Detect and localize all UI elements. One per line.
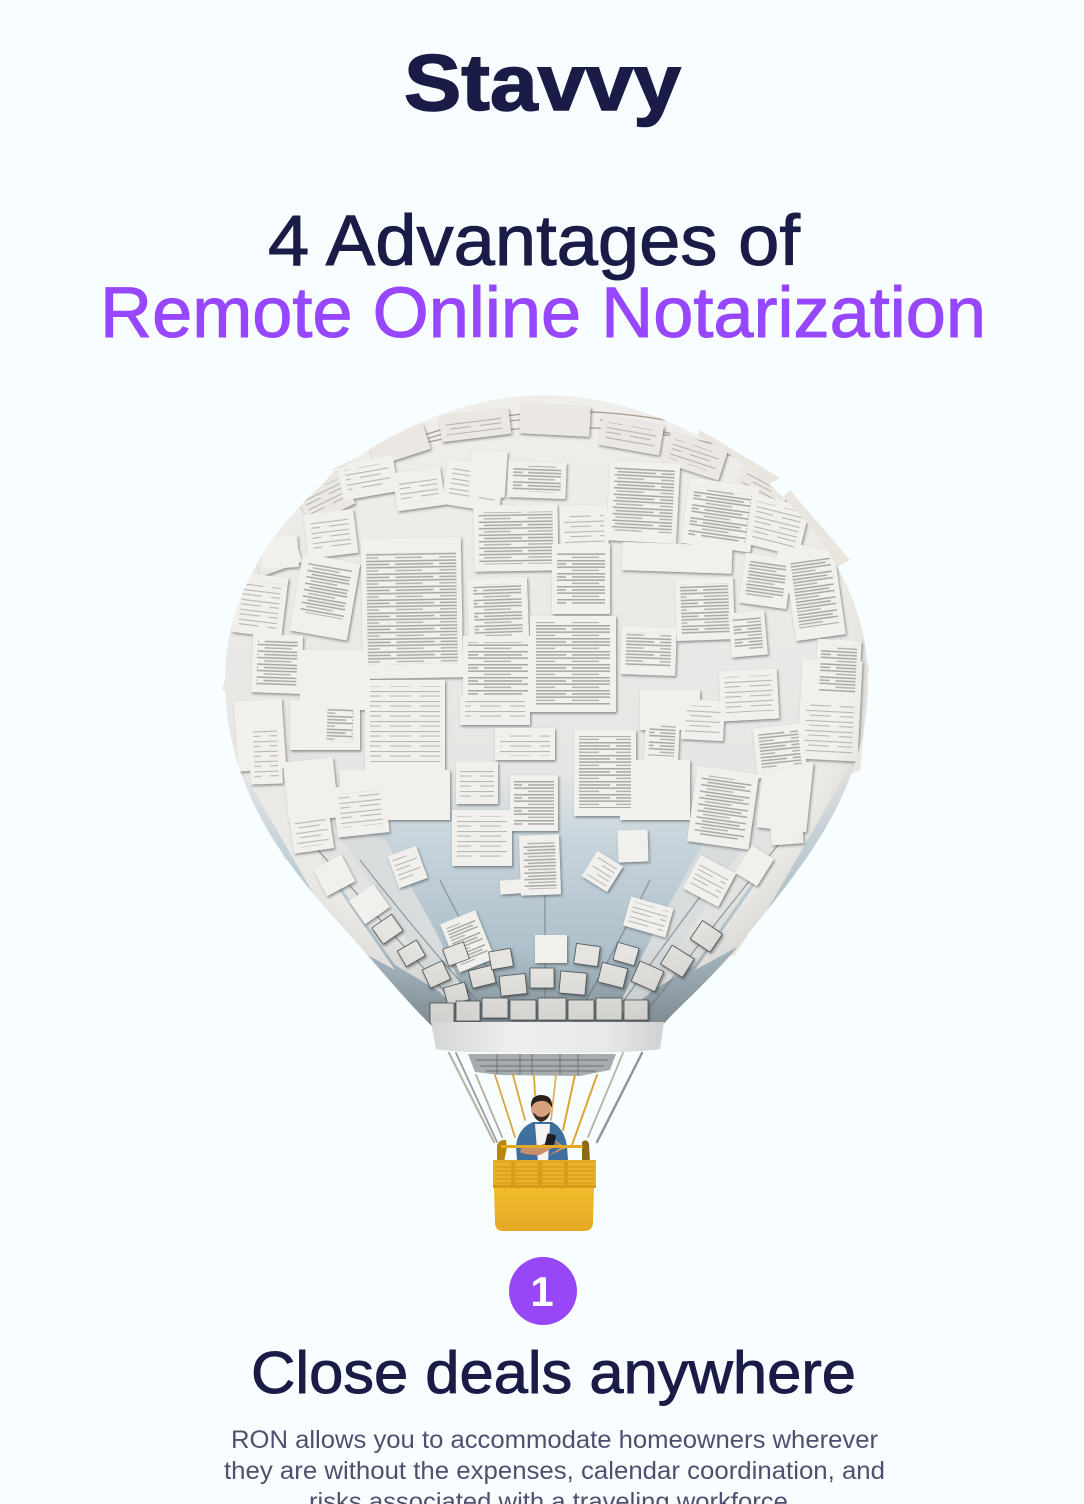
basket: [493, 1140, 596, 1231]
logo: Stavvy: Stavvy: [404, 38, 682, 127]
body text: [224, 1426, 885, 1504]
basket frame posts: [497, 1140, 507, 1162]
step number badge: [509, 1257, 577, 1325]
lower side gores: [249, 780, 841, 1012]
balloon edge papers: [222, 425, 870, 958]
edge shading: [353, 870, 798, 1026]
title: 4 Advantages of: [268, 202, 800, 281]
basket rim woven band: [493, 1162, 596, 1188]
title: Remote Online Notarization: [100, 274, 986, 353]
documents, centre top: [469, 449, 508, 498]
main large document: [361, 537, 463, 679]
body text: they are without the expenses, calendar coordination, and: [224, 1457, 885, 1485]
lower fan seams: [318, 844, 779, 1020]
person with phone: [516, 1095, 568, 1163]
balloon collar ring: [431, 1022, 664, 1053]
section heading: Close deals anywhere: [251, 1340, 856, 1406]
bottom scraps: [397, 940, 425, 967]
back papers, top: [439, 408, 511, 442]
paper documents on the envelope: [220, 390, 875, 1030]
documents, lower: [519, 834, 561, 896]
basket body: [494, 1188, 594, 1231]
documents, centre middle: [462, 636, 530, 695]
ropes: [449, 1053, 642, 1145]
hanging paper band: [468, 1054, 616, 1076]
back papers, mid wide: [232, 572, 288, 638]
title: [100, 202, 986, 353]
upper flat rows: [426, 411, 734, 458]
step number badge: 1: [530, 1268, 554, 1315]
body text: RON allows you to accommodate homeowners wherever: [231, 1426, 878, 1454]
documents, left: [337, 455, 399, 501]
illustration: paper hot-air balloon: [220, 390, 875, 1231]
balloon envelope: [225, 395, 868, 1026]
